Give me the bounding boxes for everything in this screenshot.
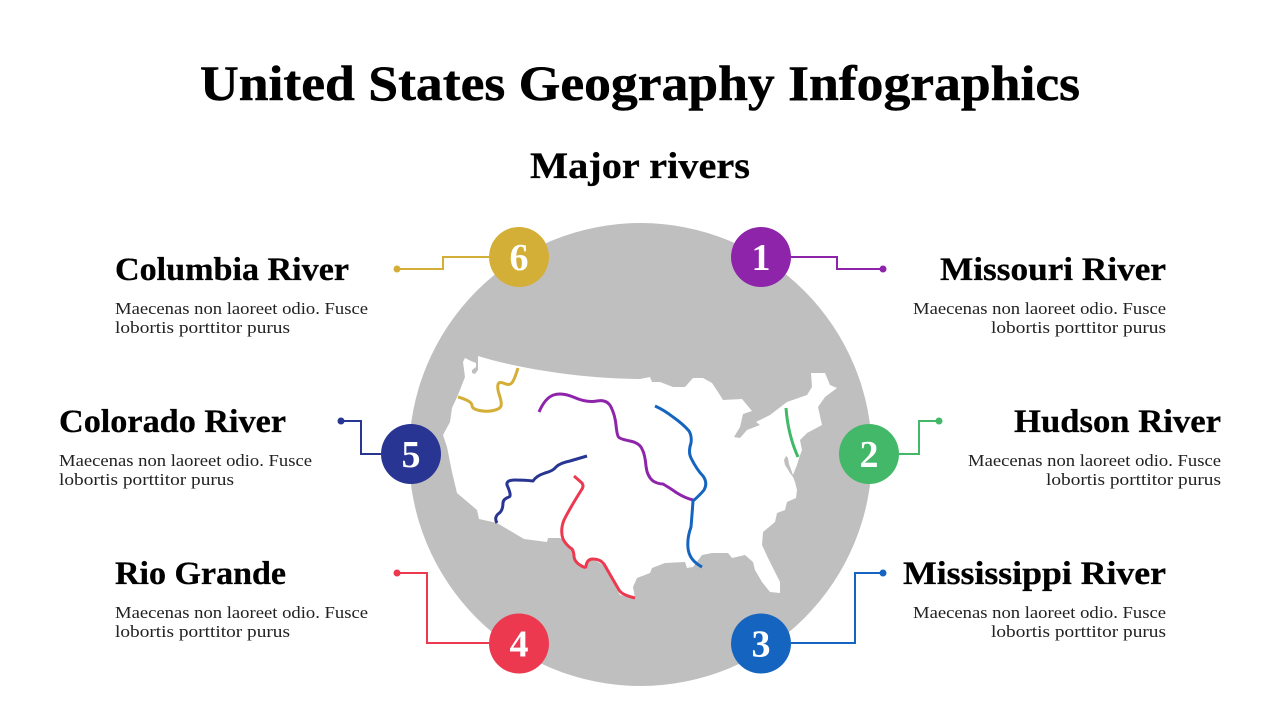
badge 6 bbox=[489, 227, 549, 287]
badge 4: 4 bbox=[510, 624, 528, 666]
badge 5: 5 bbox=[402, 434, 420, 476]
grey globe circle bbox=[409, 223, 872, 686]
river: Rio Grande bbox=[562, 476, 635, 598]
connector 2 bbox=[899, 418, 942, 454]
text block: Columbia River bbox=[115, 252, 368, 337]
connector 1 bbox=[791, 257, 886, 272]
text block: Rio Grande: Rio Grande bbox=[115, 556, 286, 592]
text block: Missouri River bbox=[913, 252, 1166, 337]
text block: Colorado River: Colorado River bbox=[59, 404, 286, 440]
text block: Mississippi River bbox=[903, 556, 1166, 641]
text block: Missouri River: lobortis porttitor purus bbox=[991, 318, 1166, 337]
text block: Columbia River: lobortis porttitor purus bbox=[115, 318, 290, 337]
connector 4 bbox=[394, 570, 489, 643]
text block: Columbia River: Columbia River bbox=[115, 252, 349, 288]
subtitle: Major rivers bbox=[530, 146, 750, 187]
river: Missouri bbox=[539, 394, 693, 500]
text block: Mississippi River: Maecenas non laoreet odio. Fusce bbox=[913, 603, 1166, 622]
map outline bbox=[443, 356, 837, 598]
badge 3 bbox=[731, 614, 791, 674]
river: Colorado bbox=[496, 456, 587, 523]
badge 1: 1 bbox=[752, 237, 770, 279]
badge 6: 6 bbox=[510, 237, 528, 279]
badge 3: 3 bbox=[752, 624, 770, 666]
text block: Rio Grande bbox=[115, 556, 368, 641]
text block: Mississippi River: Mississippi River bbox=[903, 556, 1166, 592]
connector 6 bbox=[394, 257, 489, 272]
text block: Rio Grande: lobortis porttitor purus bbox=[115, 622, 290, 641]
river: Columbia bbox=[458, 368, 518, 411]
title: United States Geography Infographics bbox=[200, 55, 1080, 111]
map: United States with rivers bbox=[443, 356, 837, 598]
badge 1 bbox=[731, 227, 791, 287]
badge 2: 2 bbox=[860, 434, 878, 476]
text block: Colorado River: Maecenas non laoreet odio. Fusce bbox=[59, 451, 312, 470]
text block: Hudson River: lobortis porttitor purus bbox=[1046, 470, 1221, 489]
badge 2 bbox=[839, 424, 899, 484]
text block: Hudson River: Hudson River bbox=[1014, 404, 1221, 440]
text block: Rio Grande: Maecenas non laoreet odio. Fusce bbox=[115, 603, 368, 622]
river: Hudson bbox=[786, 408, 798, 457]
text block: Colorado River bbox=[59, 404, 312, 489]
badge 5 bbox=[381, 424, 441, 484]
text block: Mississippi River: lobortis porttitor purus bbox=[991, 622, 1166, 641]
text block: Hudson River bbox=[968, 404, 1221, 489]
text block: Columbia River: Maecenas non laoreet odio. Fusce bbox=[115, 299, 368, 318]
badge 4 bbox=[489, 614, 549, 674]
text block: Missouri River: Maecenas non laoreet odio. Fusce bbox=[913, 299, 1166, 318]
text block: Missouri River: Missouri River bbox=[940, 252, 1166, 288]
text block: Colorado River: lobortis porttitor purus bbox=[59, 470, 234, 489]
connector 5 bbox=[338, 418, 381, 454]
text block: Hudson River: Maecenas non laoreet odio. Fusce bbox=[968, 451, 1221, 470]
connector 3 bbox=[791, 570, 886, 643]
river: Mississippi bbox=[655, 406, 706, 567]
